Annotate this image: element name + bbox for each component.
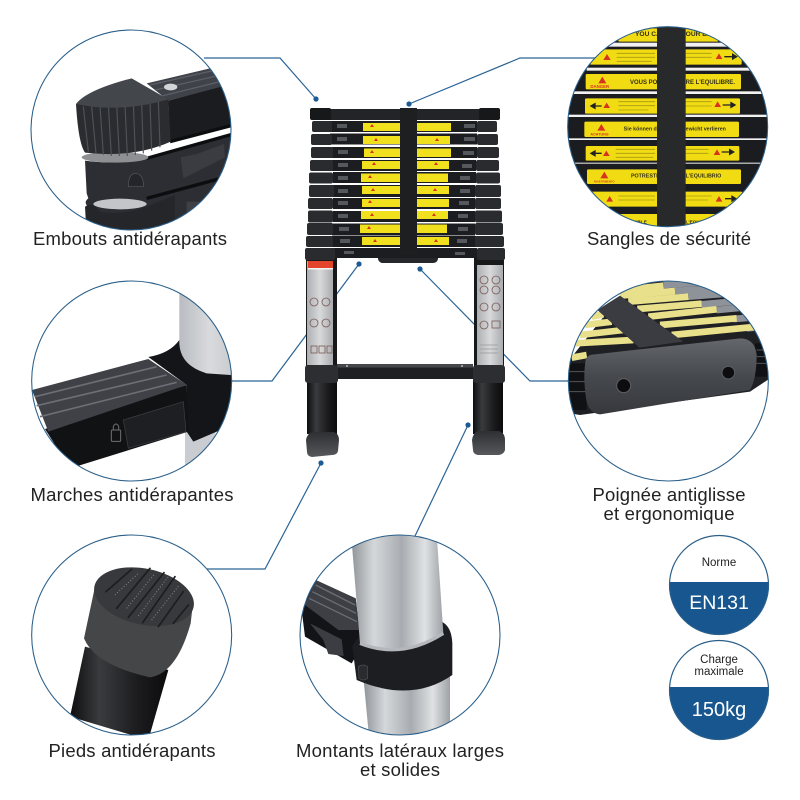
- label text: Sie können d: [624, 127, 657, 133]
- left foot: [306, 432, 339, 457]
- lower spreader bar: [337, 364, 473, 379]
- rail top face: [147, 68, 223, 101]
- caption: poignee: et ergonomique: [604, 503, 734, 524]
- label text: RE L'EQUILIBRE.: [686, 80, 735, 86]
- rail side: [168, 87, 233, 142]
- dark seams: [147, 125, 233, 198]
- label text: DANGER: [590, 84, 610, 89]
- caption: poignee: Poignée antiglisse: [592, 484, 746, 505]
- circle outline: [31, 30, 231, 230]
- right collar: [473, 365, 505, 383]
- handle grip: [584, 338, 757, 414]
- label text: L'EQUI: [686, 219, 701, 224]
- anchor dots: [313, 96, 471, 466]
- joint casting: [148, 340, 240, 442]
- caption: sangles: Sangles de sécurité: [587, 228, 751, 249]
- velcro strap: [657, 23, 686, 230]
- leader: embouts: [204, 58, 316, 99]
- lower metal ring: [93, 199, 147, 209]
- leader: poignee: [420, 269, 568, 381]
- right rung ends: [568, 343, 770, 410]
- collar band: [352, 622, 452, 691]
- foot cap top: [89, 559, 199, 635]
- padlock icon: [111, 424, 121, 441]
- tread grooves: [106, 568, 188, 627]
- right foot: [472, 431, 505, 455]
- caption: montants: [296, 740, 504, 780]
- badge: charge maximale 150kg: Charge: [700, 654, 738, 666]
- rung arm top face: [305, 580, 359, 630]
- badge: norme EN131: Norme: [702, 557, 736, 569]
- label text: YOU CAN: [635, 31, 666, 38]
- rung background: [570, 282, 768, 415]
- central telescopic ladder: [305, 108, 505, 457]
- silver upright: [179, 294, 231, 385]
- step top face: [32, 359, 187, 432]
- upper silver tube: [351, 533, 443, 650]
- metal ring upper: [82, 152, 148, 163]
- gray rung stripes: [663, 282, 754, 332]
- tread dots: [115, 573, 179, 620]
- circle: marches detail: [31, 280, 232, 482]
- label text: L'EQUILIBRIO: [686, 173, 721, 179]
- label text: OUR BA: [686, 31, 712, 38]
- right lower tube: [473, 380, 503, 434]
- rung bars: [330, 121, 477, 258]
- small print lines: [616, 53, 712, 200]
- badge: charge maximale 150kg: maximale: [694, 666, 744, 678]
- circle: montants detail: [295, 530, 515, 743]
- left end caps: [305, 121, 335, 260]
- caption: embouts: Embouts antidérapants: [33, 228, 227, 249]
- badge: norme EN131: EN131: [689, 592, 749, 614]
- warning label triangles: [367, 124, 439, 242]
- collar and lower rung arm: [85, 136, 230, 220]
- arm latch: [310, 623, 344, 656]
- label text: [590, 31, 735, 224]
- sliding lock: [181, 144, 225, 178]
- black tube: [70, 647, 168, 740]
- badge: norme EN131: [669, 536, 769, 636]
- circle: pieds detail: [31, 534, 232, 736]
- collar button: [358, 665, 368, 680]
- leader: montants: [415, 425, 468, 536]
- sliding lock: [123, 402, 186, 448]
- leader: pieds: [207, 463, 321, 569]
- strap: [597, 296, 683, 348]
- label text: VOUS POU: [630, 80, 662, 86]
- rail rivet: [164, 84, 177, 90]
- central safety strap: [400, 108, 417, 255]
- yellow warning labels: [360, 123, 451, 245]
- circle: sangles detail: [567, 26, 768, 228]
- circle outline: [32, 535, 232, 735]
- step ridges: [35, 367, 177, 417]
- caption: montants: Montants latéraux larges: [296, 740, 504, 761]
- carry handle: [378, 255, 438, 263]
- yellow labels: [584, 28, 742, 227]
- foot cap side: [84, 570, 193, 677]
- lower arm: [85, 196, 175, 230]
- leader: marches: [232, 264, 359, 381]
- white gaps between rungs: [568, 43, 768, 164]
- leader: sangles: [409, 58, 597, 104]
- right end caps: [475, 121, 505, 260]
- step front face: [45, 385, 188, 468]
- knob side: [76, 99, 171, 154]
- label text: AVVERTIMENTO: [594, 179, 615, 183]
- caption: marches: Marches antidérapantes: [30, 484, 234, 505]
- circle outline: [568, 27, 768, 227]
- badge: charge maximale 150kg: 150kg: [692, 699, 746, 721]
- label text: ACHTUNG: [590, 132, 609, 136]
- pale yellow stripes: [572, 286, 757, 358]
- caption: montants: et solides: [360, 759, 440, 780]
- arrows: [591, 54, 737, 201]
- caption: poignee: [592, 484, 746, 524]
- left lower tube: [307, 380, 337, 434]
- rung arm black body: [302, 580, 362, 663]
- collar rim: [360, 633, 443, 650]
- label text: SSIBLE: [630, 219, 647, 224]
- rung sliding latches: [337, 124, 475, 255]
- circle outline: [300, 535, 500, 735]
- top cap rail: [310, 108, 500, 120]
- right upper pole: [474, 258, 504, 368]
- caption: pieds: Pieds antidérapants: [48, 740, 216, 761]
- badge: charge maximale 150kg: [669, 640, 769, 741]
- bumps: [128, 173, 143, 187]
- left upper pole: [306, 258, 337, 368]
- knob top: [76, 78, 168, 108]
- circle outline: [568, 281, 768, 481]
- left collar: [305, 365, 338, 383]
- circle: poignee detail: [568, 280, 769, 482]
- leader lines and dots: [204, 58, 597, 569]
- circle outline: [32, 281, 232, 481]
- circle: embouts detail: [30, 30, 232, 230]
- lower silver tube: [363, 670, 450, 737]
- label text: POTRESTI: [631, 173, 658, 179]
- warning triangles: [597, 53, 722, 202]
- label text: ewicht verlieren: [686, 127, 726, 133]
- handle holes: [617, 366, 735, 393]
